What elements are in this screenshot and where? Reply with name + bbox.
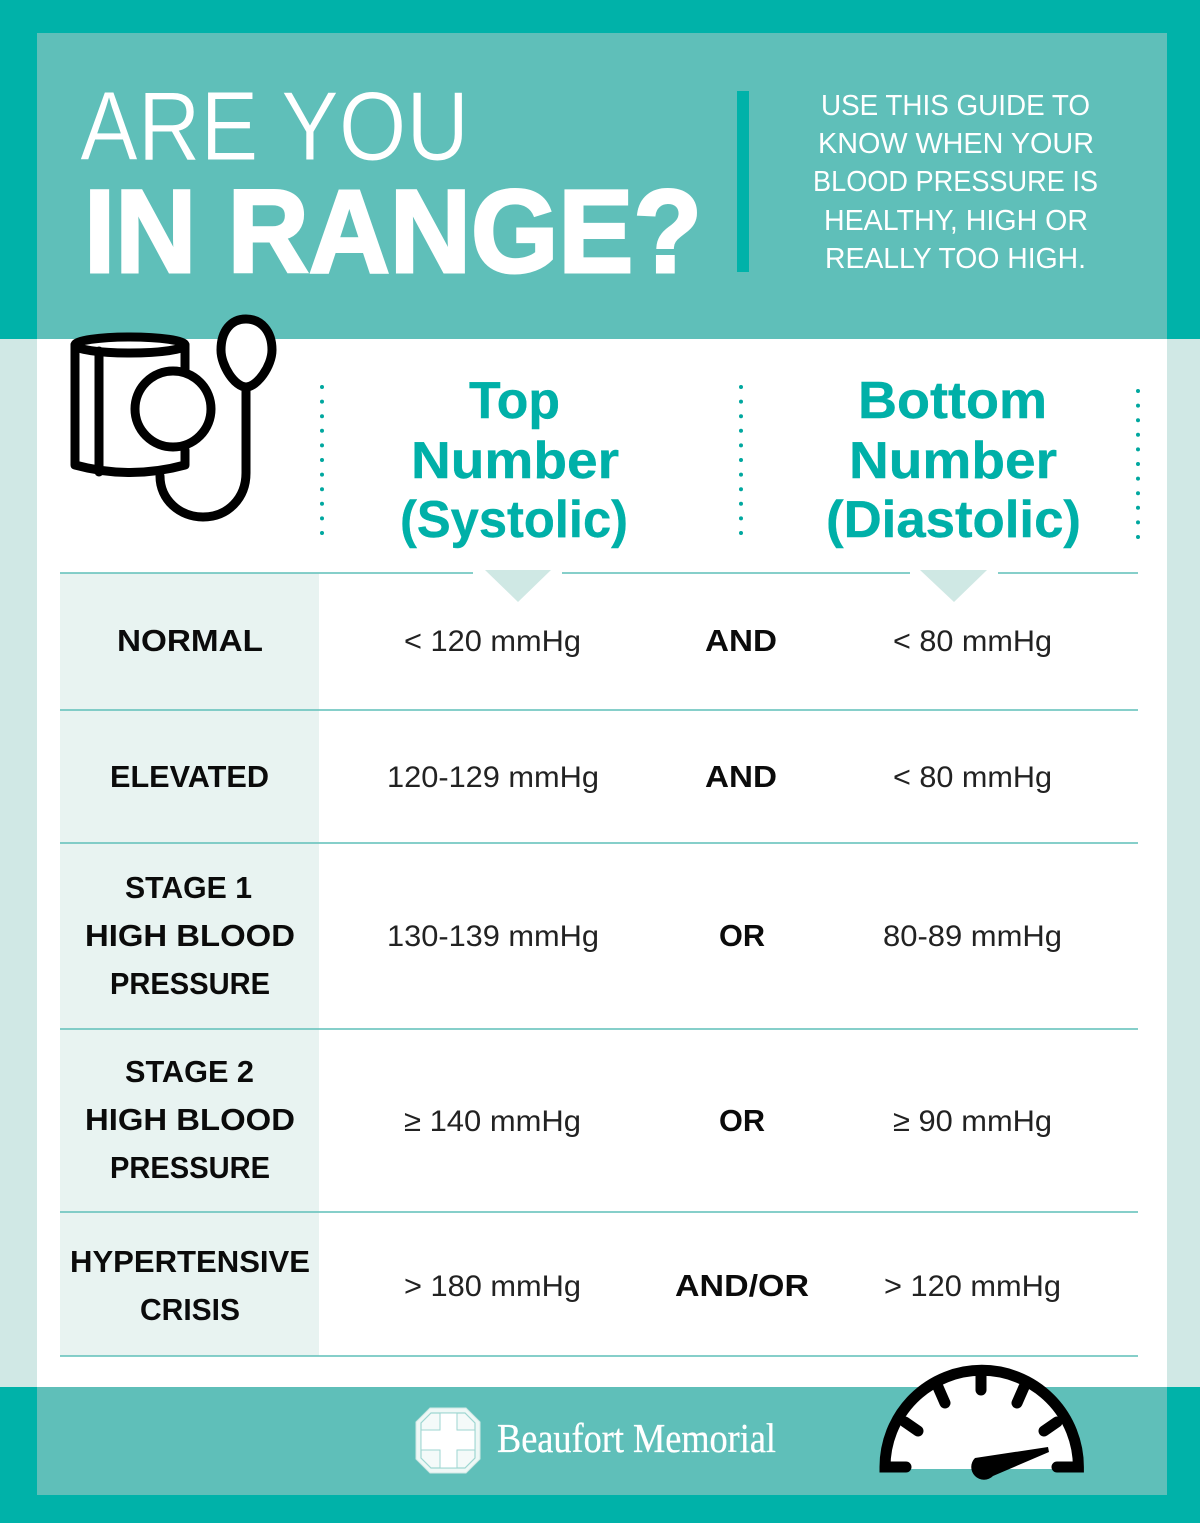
icon: speedometer gauge [885,1370,1078,1480]
row: hypertensive crisis: HYPERTENSIVE [70,1244,310,1279]
intro text [813,90,1098,275]
title [80,71,702,298]
title: ARE YOU [80,71,469,181]
divider bar [737,91,749,272]
row: stage 2: ≥ 140 mmHg [404,1105,581,1138]
intro text: USE THIS GUIDE TO [821,90,1090,122]
row: stage 2: ≥ 90 mmHg [893,1105,1052,1138]
logo: Beaufort Memorial [416,1408,776,1473]
row: normal: < 80 mmHg [893,625,1052,658]
row: hypertensive crisis: > 120 mmHg [884,1270,1061,1303]
pointer triangles [485,570,987,602]
row: elevated: < 80 mmHg [893,761,1052,794]
row: normal [117,623,1052,658]
row: stage 2: STAGE 2 [125,1054,254,1089]
panel: header band [0,0,1200,339]
row: stage 1: OR [719,918,765,953]
row: stage 1: PRESSURE [110,966,270,1001]
row: normal: < 120 mmHg [404,625,581,658]
row: hypertensive crisis [70,1244,1061,1327]
heading: bottom number: Bottom [858,372,1047,430]
row: elevated: ELEVATED [110,759,269,794]
intro text: BLOOD PRESSURE IS [813,166,1098,198]
heading: top number: Number [411,432,619,490]
row: stage 1: 130-139 mmHg [387,920,599,953]
heading: top number: Top [469,372,560,430]
heading: bottom number: (Diastolic) [826,491,1081,549]
row: elevated: 120-129 mmHg [387,761,599,794]
row: elevated [110,759,1052,794]
row: elevated: AND [705,759,777,794]
row: hypertensive crisis: CRISIS [140,1292,240,1327]
row: hypertensive crisis: AND/OR [675,1268,809,1303]
row: normal: AND [705,623,777,658]
heading: bottom number: Number [849,432,1057,490]
title: IN RANGE? [84,166,702,298]
heading: bottom number [826,372,1081,549]
row: stage 2: PRESSURE [110,1150,270,1185]
row: stage 1: STAGE 1 [125,870,252,905]
intro text: KNOW WHEN YOUR [818,128,1094,160]
row: normal: NORMAL [117,623,263,658]
row: hypertensive crisis: > 180 mmHg [404,1270,581,1303]
heading: top number [400,372,628,549]
row: stage 1: 80-89 mmHg [883,920,1062,953]
row label backgrounds [60,573,319,1356]
row: stage 2 [85,1054,1052,1185]
heading: top number: (Systolic) [400,491,628,549]
row: stage 2: OR [719,1103,765,1138]
row: stage 2: HIGH BLOOD [85,1102,295,1137]
panel: footer band [0,1387,1200,1523]
intro text: REALLY TOO HIGH. [825,243,1086,275]
icon: blood pressure cuff [75,319,272,517]
intro text: HEALTHY, HIGH OR [824,205,1088,237]
dotted column dividers [322,387,1138,538]
row: stage 1 [85,870,1062,1001]
row: stage 1: HIGH BLOOD [85,918,295,953]
logo: Beaufort Memorial: Beaufort Memorial [497,1415,776,1461]
